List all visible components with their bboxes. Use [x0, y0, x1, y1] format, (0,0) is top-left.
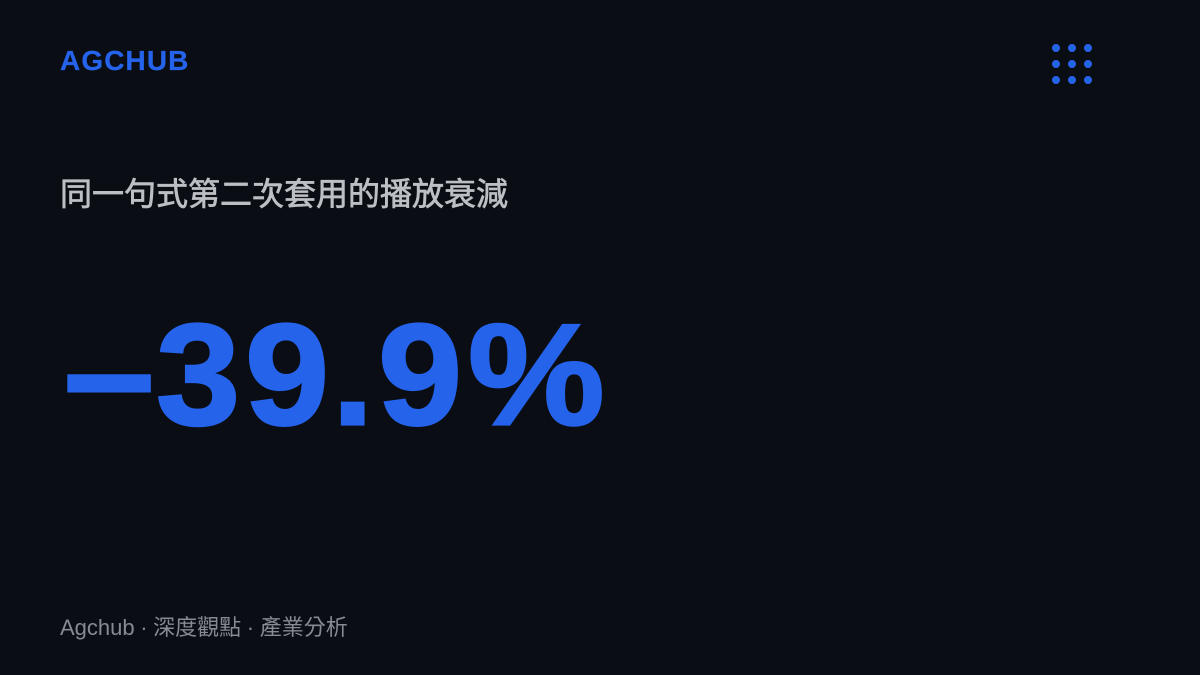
- big statistic: −: [62, 302, 156, 463]
- big statistic: .: [332, 295, 374, 456]
- footer text: Agchub · 深度觀點 · 產業分析: [60, 615, 348, 640]
- heading: 同一句式第二次套用的播放衰減: [60, 176, 508, 212]
- big statistic: 9: [244, 295, 329, 456]
- big statistic: 9: [378, 295, 462, 456]
- big statistic: %: [468, 295, 604, 456]
- icon: dot grid: [1052, 44, 1092, 84]
- big statistic: [62, 295, 604, 463]
- brand logo text: AGCHUB: [60, 45, 189, 76]
- big statistic: 3: [156, 295, 240, 456]
